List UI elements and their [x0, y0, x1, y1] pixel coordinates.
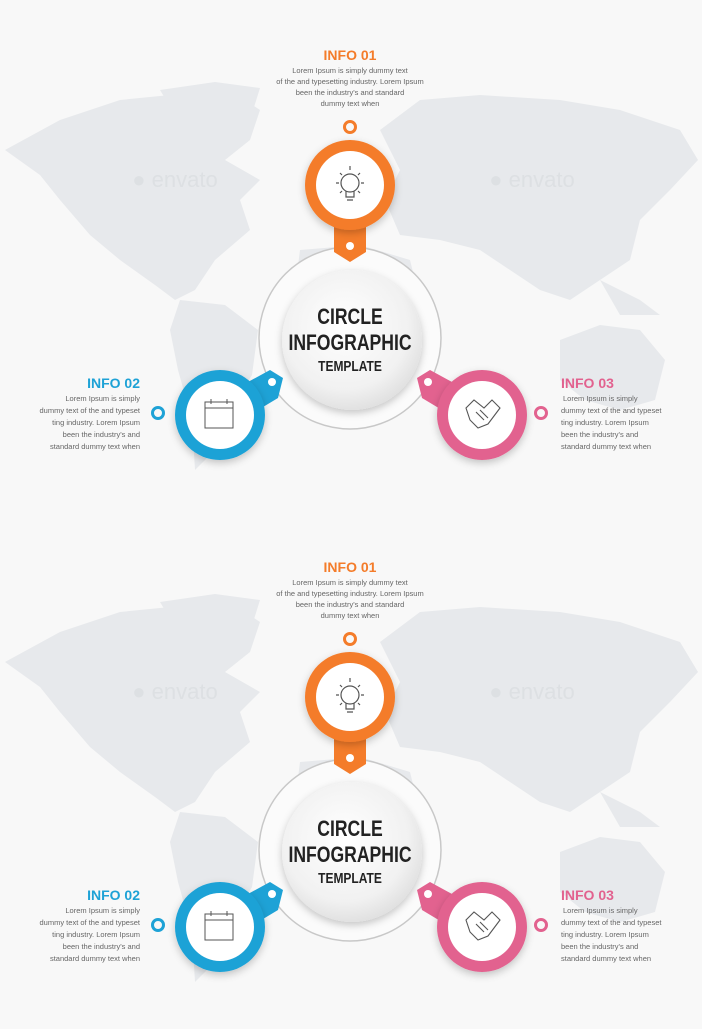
text: INFO 03: ting industry. Lorem Ipsum [561, 930, 649, 939]
center circle: INFOGRAPHIC [288, 843, 412, 868]
center circle: TEMPLATE [318, 358, 382, 374]
text: INFO 02 [40, 887, 141, 963]
center circle: TEMPLATE [318, 870, 382, 886]
text: INFO 03: INFO 03 [561, 887, 614, 903]
text: INFO 03: Lorem Ipsum is simply [563, 394, 638, 403]
world map background [5, 82, 698, 470]
center circle: INFOGRAPHIC [288, 331, 412, 356]
heading: INFO 01: Lorem Ipsum is simply dummy text [292, 66, 409, 75]
heading: INFO 01: INFO 01 [324, 559, 377, 575]
heading: INFO 01 [276, 47, 424, 108]
text: INFO 02: standard dummy text when [50, 442, 140, 451]
node: pink handshake [417, 370, 546, 460]
center circle: CIRCLE [317, 305, 383, 330]
watermark: envato left: ● envato [132, 679, 218, 704]
text: INFO 03 [561, 375, 662, 451]
text: INFO 02: ting industry. Lorem Ipsum [52, 418, 140, 427]
text: INFO 02: INFO 02 [87, 375, 140, 391]
world map background [5, 594, 698, 982]
text: INFO 02: Lorem Ipsum is simply [65, 394, 140, 403]
heading: INFO 01: dummy text when [321, 611, 379, 620]
text: INFO 02: ting industry. Lorem Ipsum [52, 930, 140, 939]
text: INFO 02: Lorem Ipsum is simply [65, 906, 140, 915]
heading: INFO 01: been the industry's and standard [296, 88, 404, 97]
heading: INFO 01 [276, 559, 424, 620]
text: INFO 02: INFO 02 [87, 887, 140, 903]
watermark: envato left: ● envato [132, 167, 218, 192]
text: INFO 03: been the industry's and [561, 430, 638, 439]
heading: INFO 01: dummy text when [321, 99, 379, 108]
node: blue calendar [152, 882, 283, 972]
heading: INFO 01: INFO 01 [324, 47, 377, 63]
heading: INFO 01: Lorem Ipsum is simply dummy text [292, 578, 409, 587]
panel: bottom infographic [6, 559, 698, 982]
panel: top infographic [6, 47, 698, 470]
text: INFO 03: dummy text of the and typeset [561, 918, 662, 927]
text: INFO 02 [40, 375, 141, 451]
heading: INFO 01: been the industry's and standard [296, 600, 404, 609]
text: INFO 03: standard dummy text when [561, 954, 651, 963]
text: INFO 03 [561, 887, 662, 963]
watermark: envato right: ● envato [489, 167, 575, 192]
text: INFO 03: dummy text of the and typeset [561, 406, 662, 415]
text: INFO 02: been the industry's and [63, 942, 140, 951]
node: pink handshake [417, 882, 546, 972]
heading: INFO 01: of the and typesetting industry. Lorem Ipsum [276, 589, 424, 598]
text: INFO 03: INFO 03 [561, 375, 614, 391]
text: INFO 03: been the industry's and [561, 942, 638, 951]
node: blue calendar [152, 370, 283, 460]
node: orange lightbulb [305, 634, 395, 774]
center circle: CIRCLE [317, 817, 383, 842]
watermark: envato right: ● envato [489, 679, 575, 704]
heading: INFO 01: of the and typesetting industry. Lorem Ipsum [276, 77, 424, 86]
center circle [259, 759, 441, 941]
text: INFO 02: dummy text of the and typeset [40, 918, 141, 927]
center circle [259, 247, 441, 429]
node: orange lightbulb [305, 122, 395, 262]
text: INFO 02: dummy text of the and typeset [40, 406, 141, 415]
text: INFO 03: ting industry. Lorem Ipsum [561, 418, 649, 427]
text: INFO 03: Lorem Ipsum is simply [563, 906, 638, 915]
text: INFO 02: been the industry's and [63, 430, 140, 439]
text: INFO 02: standard dummy text when [50, 954, 140, 963]
text: INFO 03: standard dummy text when [561, 442, 651, 451]
